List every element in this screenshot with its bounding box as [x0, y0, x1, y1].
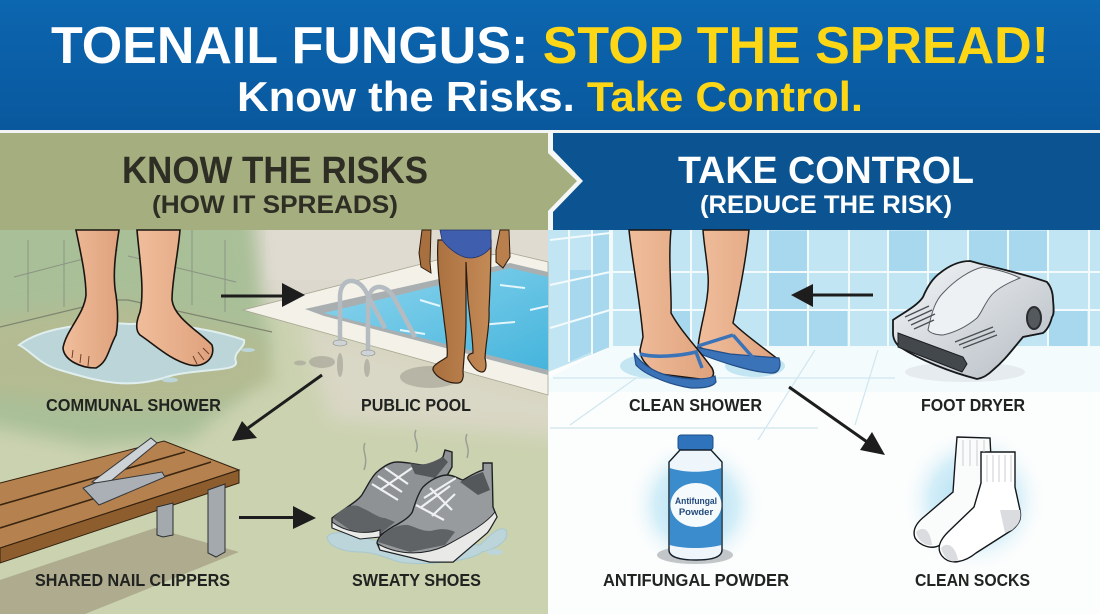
illustration: antifungal powder bottle: [628, 435, 764, 573]
illustration: foot dryer: [893, 261, 1054, 382]
icon: nail clippers: [83, 438, 165, 505]
illustration: antifungal powder bottle: Powder: [679, 507, 713, 518]
wall, right side: [252, 230, 346, 304]
bottle label: Antifungal: [675, 496, 717, 507]
heading: take control: TAKE CONTROL: [678, 150, 974, 192]
label: communal shower: COMMUNAL SHOWER: [46, 395, 221, 415]
title: TOENAIL FUNGUS: STOP THE SPREAD!: [51, 17, 1049, 75]
illustration: public pool and swimmer: [243, 230, 548, 395]
header banner: [0, 0, 1100, 133]
label: foot dryer: FOOT DRYER: [921, 395, 1025, 415]
darker tiles: [650, 231, 1087, 347]
heading band: take control: [548, 133, 1100, 230]
arrow: pool to bench: [232, 375, 322, 441]
bench shadow: [0, 528, 239, 614]
subheading: reduce the risk: (REDUCE THE RISK): [700, 191, 952, 219]
panel: know the risks: [0, 230, 548, 614]
illustration: clean socks: [902, 428, 1046, 572]
wall tile lines: [14, 230, 236, 312]
subheading: how it spreads: (HOW IT SPREADS): [152, 191, 398, 219]
arrow: shower to pool: [221, 283, 305, 307]
heading: know the risks: KNOW THE RISKS: [122, 150, 428, 192]
arrow: foot dryer to shower: [791, 284, 873, 307]
label: clean shower: CLEAN SHOWER: [629, 395, 762, 415]
illustration: bare feet in communal shower: [19, 230, 255, 383]
panel: take control background: [548, 230, 1100, 614]
illustration: feet in flip-flops: [620, 230, 785, 388]
label: shared nail clippers: SHARED NAIL CLIPPERS: [35, 570, 230, 590]
label: public pool: PUBLIC POOL: [361, 395, 471, 415]
mould stains: [0, 230, 274, 450]
label: clean socks: CLEAN SOCKS: [915, 570, 1030, 590]
arrow: bench to shoes: [239, 506, 316, 529]
swimmer legs: [433, 240, 491, 383]
label: sweaty shoes: SWEATY SHOES: [352, 570, 481, 590]
arrow: shower to socks: [789, 387, 885, 455]
label: antifungal powder: ANTIFUNGAL POWDER: [603, 570, 789, 590]
subtitle: Know the Risks. Take Control.: [237, 73, 863, 120]
panel heading band: know the risks: [0, 133, 583, 230]
illustration: sweaty shoes: [327, 430, 507, 564]
illustration: wooden bench with nail clippers: [0, 438, 239, 563]
